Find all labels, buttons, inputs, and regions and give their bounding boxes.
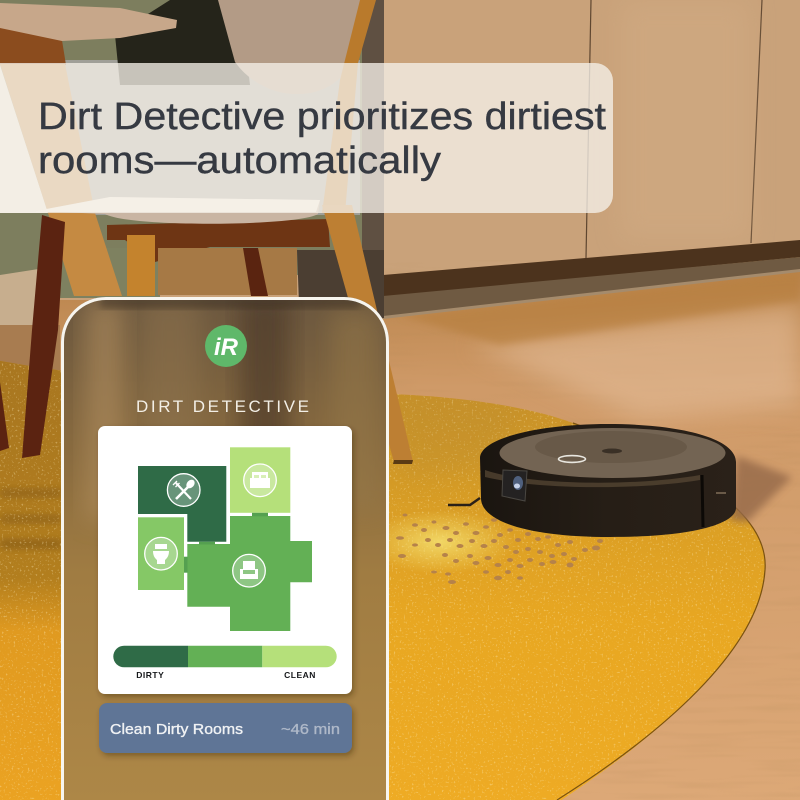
baseboard <box>383 240 800 297</box>
robot vacuum <box>448 424 736 537</box>
phone screen background <box>61 295 389 800</box>
room: living room <box>187 516 312 631</box>
basket <box>158 248 297 295</box>
chair seat <box>36 197 320 224</box>
robot body <box>480 424 736 537</box>
chair <box>0 0 413 464</box>
chair frame <box>107 219 330 262</box>
table leg upper <box>0 28 66 65</box>
wood floor <box>0 250 800 800</box>
icon: bed <box>244 464 276 497</box>
dirt level scale: DIRTY <box>136 670 164 680</box>
dirt level scale <box>113 645 337 680</box>
icon: toilet <box>145 537 177 570</box>
wall seen behind the panel <box>60 60 360 215</box>
icon: fork and spoon <box>167 474 200 506</box>
room: bedroom <box>230 447 290 513</box>
debris pile <box>396 514 603 584</box>
headline text <box>38 96 606 182</box>
debris glow <box>365 510 515 574</box>
robot shadow <box>730 456 792 522</box>
top plate <box>500 428 726 478</box>
side brush <box>448 498 480 505</box>
light ring <box>558 456 586 462</box>
rug edge <box>557 423 765 800</box>
center disc <box>535 431 687 463</box>
room: kitchen <box>138 466 226 542</box>
room: bathroom <box>138 517 184 590</box>
table <box>0 3 177 296</box>
app logo <box>205 325 247 367</box>
chair backrest <box>218 0 363 94</box>
map card <box>98 426 352 694</box>
sensor <box>602 448 622 454</box>
white wall sliver <box>0 65 48 213</box>
wall cabinets <box>355 0 800 300</box>
dirt level scale: CLEAN <box>284 670 316 680</box>
rim highlight <box>485 470 700 487</box>
dark wedge under counter <box>297 250 384 330</box>
headline text: rooms—automatically <box>38 140 441 182</box>
tabletop <box>0 3 177 41</box>
chair back post <box>322 0 376 213</box>
headline panel <box>0 63 613 213</box>
dark wall strip <box>362 0 384 318</box>
headline text: Dirt Detective prioritizes dirtiest <box>38 96 606 138</box>
rug <box>0 350 775 800</box>
front legs <box>127 235 155 296</box>
action button: Clean Dirty Rooms <box>110 721 243 738</box>
app logo: iR <box>214 334 239 361</box>
left wall <box>0 0 384 275</box>
table leg lower <box>0 64 122 296</box>
phone outline <box>62 298 388 800</box>
action button <box>99 703 352 753</box>
camera <box>502 470 527 501</box>
plant <box>115 0 250 85</box>
seam <box>702 475 703 527</box>
icon: armchair <box>233 554 265 587</box>
dark legs <box>22 215 65 458</box>
doorways <box>184 513 268 573</box>
phone mockup <box>61 295 389 800</box>
app title: DIRT DETECTIVE <box>136 397 309 416</box>
action button: ~46 min <box>281 721 340 738</box>
